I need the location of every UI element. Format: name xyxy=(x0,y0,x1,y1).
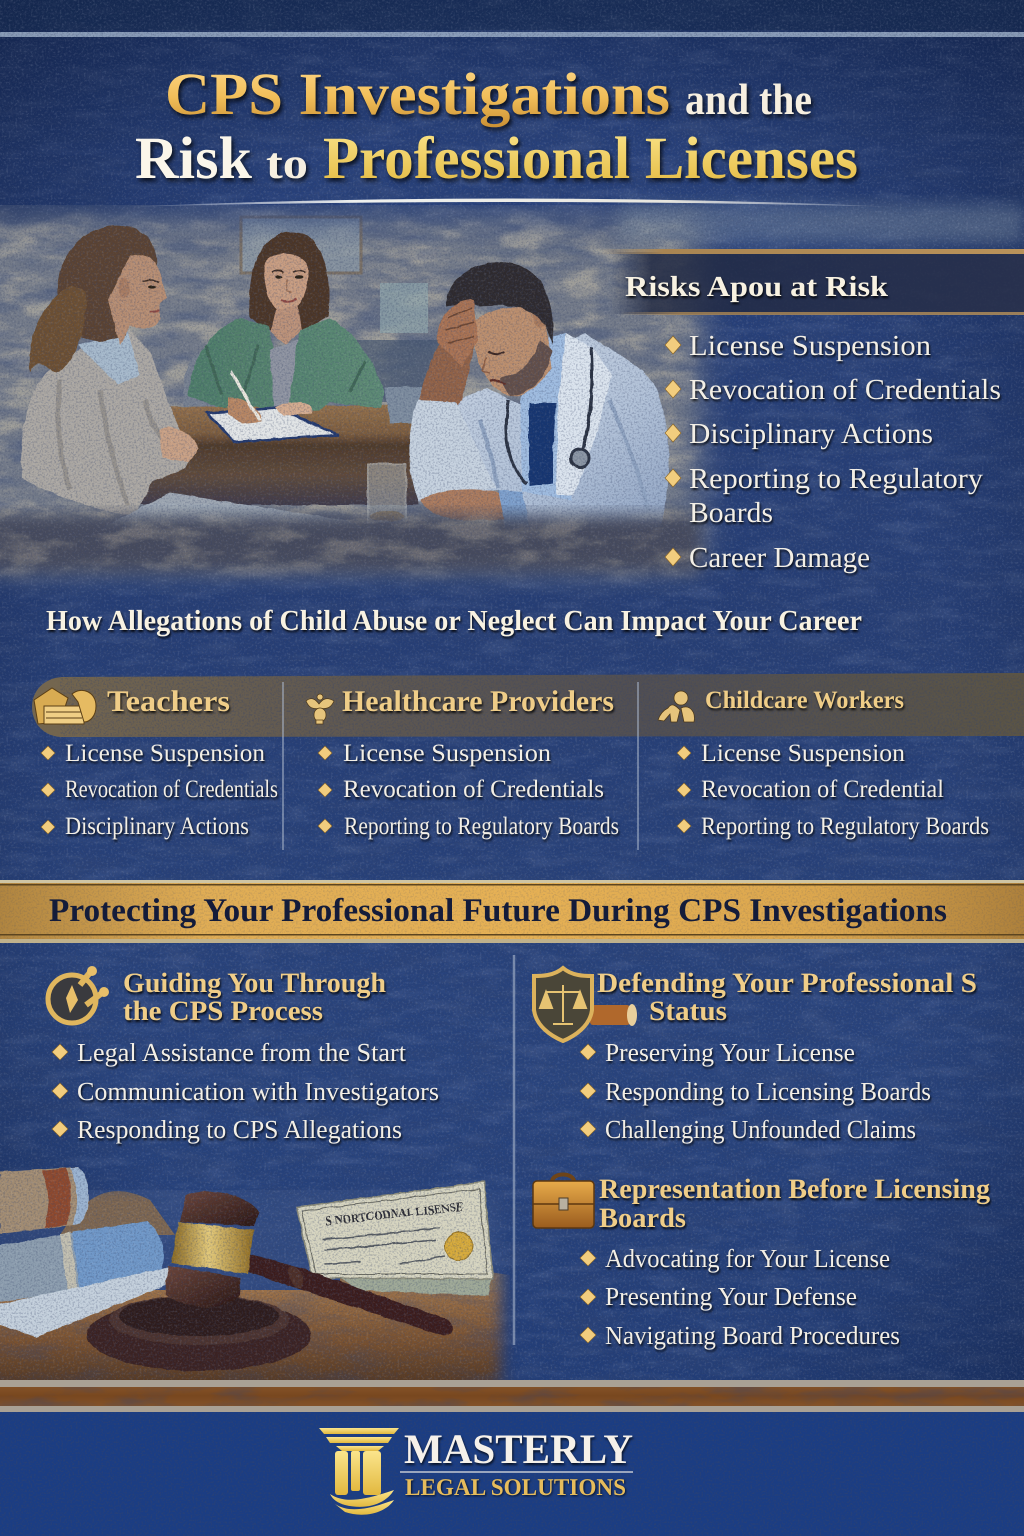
list: defending: Challenging Unfounded Claims xyxy=(605,1115,916,1144)
section: representation before licensing boards: Representation Before Licensing xyxy=(599,1174,990,1205)
list: guiding xyxy=(52,1038,439,1144)
column: childcare workers xyxy=(658,687,989,840)
logo: Masterly Legal Solutions: MASTERLY xyxy=(404,1427,633,1473)
list: healthcare xyxy=(318,740,619,840)
icon: compass xyxy=(48,966,109,1023)
list: healthcare: Reporting to Regulatory Boards xyxy=(344,813,619,840)
title xyxy=(135,61,858,191)
list: representation xyxy=(580,1244,900,1350)
list: risks: Boards xyxy=(689,497,773,529)
list: childcare: Revocation of Credential xyxy=(701,776,944,803)
professional license certificate: S NORTCODNAL LISENSE xyxy=(325,1200,464,1228)
column: healthcare providers xyxy=(306,685,619,840)
icon: gold column xyxy=(319,1428,399,1515)
center woman in green cardigan xyxy=(188,232,384,413)
hands on clipboard xyxy=(228,370,313,424)
list: risks xyxy=(665,330,1001,574)
icon: briefcase xyxy=(533,1174,594,1228)
list: healthcare: Revocation of Credentials xyxy=(343,776,604,803)
clipboard xyxy=(207,408,339,442)
foreground desk xyxy=(0,505,706,577)
icon: caregiver and child xyxy=(658,691,694,722)
icon: shield and gavel xyxy=(534,968,637,1041)
list: risks: License Suspension xyxy=(689,330,932,362)
column: teachers: Teachers xyxy=(107,685,230,718)
list: risks: Disciplinary Actions xyxy=(689,418,933,450)
list: defending: Responding to Licensing Boards xyxy=(605,1077,931,1106)
scene backdrop and table xyxy=(0,1190,520,1390)
list: teachers: Disciplinary Actions xyxy=(65,813,249,840)
list: representation: Presenting Your Defense xyxy=(605,1282,857,1311)
professions header band xyxy=(32,673,1024,737)
panel: professions xyxy=(32,673,1024,850)
subheading: career impact: How Allegations of Child Abuse or Neglect Can Impact Your Career xyxy=(46,605,862,637)
stacked books xyxy=(0,1167,172,1337)
title underline rule xyxy=(120,198,900,207)
gold banner: protecting your professional future: Protecting Your Professional Future During CPS Investigations xyxy=(49,893,947,929)
section: representation before licensing boards xyxy=(533,1174,990,1350)
column: childcare workers: Childcare Workers xyxy=(705,687,904,714)
wooden footer rail xyxy=(0,1380,1024,1412)
footer panel xyxy=(0,1412,1024,1536)
list: healthcare: License Suspension xyxy=(343,740,552,767)
list: guiding: Communication with Investigators xyxy=(77,1077,439,1106)
list: defending xyxy=(580,1038,931,1144)
list: teachers: Revocation of Credentials xyxy=(65,776,278,803)
panel: risks at risk xyxy=(600,249,1024,574)
section: defending your professional status: Status xyxy=(649,996,727,1027)
gavel handle xyxy=(248,1254,452,1335)
panel header bar: Risks Apou at Risk xyxy=(625,271,889,303)
gavel base xyxy=(87,1295,311,1371)
logo: Masterly Legal Solutions xyxy=(319,1427,633,1515)
section: guiding you through the CPS process: the CPS Process xyxy=(123,996,323,1027)
list: risks: Career Damage xyxy=(689,542,870,574)
professional license certificate xyxy=(297,1182,493,1296)
icon: books and apple xyxy=(34,688,96,724)
list: childcare: Reporting to Regulatory Boards xyxy=(701,813,989,840)
list: risks: Revocation of Credentials xyxy=(689,374,1001,406)
logo: Masterly Legal Solutions: LEGAL SOLUTIONS xyxy=(405,1475,626,1501)
list: representation: Advocating for Your License xyxy=(605,1244,890,1273)
gavel head xyxy=(165,1191,259,1307)
papers on desk xyxy=(98,493,370,548)
list: teachers: License Suspension xyxy=(65,740,266,767)
title: to xyxy=(266,139,308,188)
list: representation: Navigating Board Procedures xyxy=(605,1321,900,1350)
section: defending your professional status: Defending Your Professional S xyxy=(597,968,977,999)
column: healthcare providers: Healthcare Providers xyxy=(342,685,614,718)
list: defending: Preserving Your License xyxy=(605,1038,855,1067)
list: guiding: Legal Assistance from the Start xyxy=(77,1038,407,1067)
section: representation before licensing boards: Boards xyxy=(599,1203,686,1234)
list: childcare xyxy=(677,740,989,840)
title: and the xyxy=(685,75,812,124)
list: childcare: License Suspension xyxy=(701,740,906,767)
list: teachers xyxy=(41,740,278,840)
chair xyxy=(183,348,225,420)
left woman seen in profile xyxy=(21,226,199,516)
title: Risk xyxy=(135,125,253,191)
gavel and license still life xyxy=(0,1167,520,1390)
icon: caduceus xyxy=(306,694,334,724)
hero illustration: CPS meeting with distressed doctor xyxy=(0,205,1024,595)
list: guiding: Responding to CPS Allegations xyxy=(77,1115,402,1144)
glass of water xyxy=(368,464,406,522)
window and picture in background xyxy=(241,217,440,402)
hero backdrop xyxy=(0,205,740,595)
section: defending your professional status xyxy=(534,968,977,1144)
section: guiding you through the CPS process xyxy=(48,966,439,1144)
top-right backdrop haze xyxy=(620,205,1024,243)
panel header bar xyxy=(600,249,1024,315)
gold banner: protecting your professional future xyxy=(0,880,1024,943)
section: guiding you through the CPS process: Guiding You Through xyxy=(123,968,386,999)
distressed doctor xyxy=(409,262,669,530)
table xyxy=(130,405,418,505)
list: risks: Reporting to Regulatory xyxy=(689,463,984,495)
title: Professional Licenses xyxy=(323,125,858,191)
mug xyxy=(384,387,424,423)
column: teachers xyxy=(34,685,278,840)
column divider xyxy=(513,955,515,1345)
title: CPS Investigations xyxy=(165,61,670,128)
